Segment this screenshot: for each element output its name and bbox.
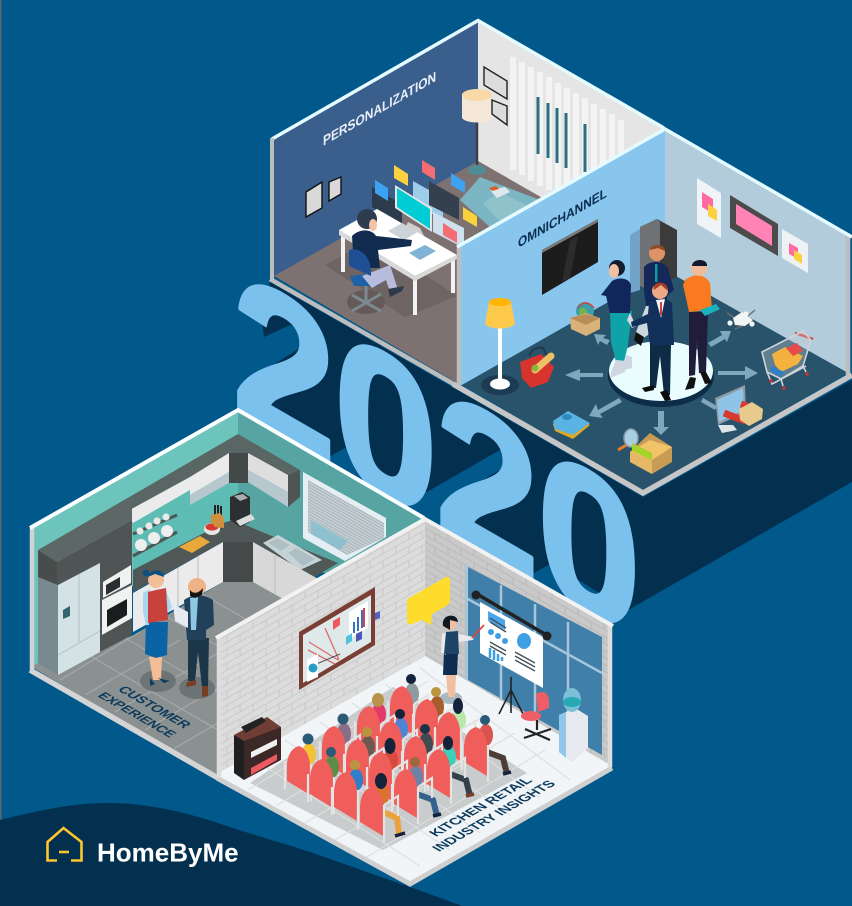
room: omnichannel xyxy=(453,129,852,493)
soffit xyxy=(38,434,300,550)
fridge xyxy=(38,563,100,675)
drone xyxy=(727,310,755,329)
row 4 seat 2 xyxy=(413,687,453,754)
woman with vest xyxy=(140,570,176,692)
room: personalization xyxy=(270,20,665,386)
cardboard box with magnifier xyxy=(618,429,672,474)
floor lamp xyxy=(481,298,519,395)
row 3 seat 3 xyxy=(402,724,442,791)
desk xyxy=(339,209,457,315)
row 2 seat 1 xyxy=(320,714,360,781)
counter top xyxy=(133,520,338,592)
floor xyxy=(274,161,560,383)
row 2 seat 2 xyxy=(344,727,384,794)
desk monitor xyxy=(395,185,432,236)
row 1 seat 1 xyxy=(285,734,316,801)
base strip xyxy=(217,768,612,884)
customer experience label: EXPERIENCE xyxy=(94,690,180,740)
icon: house xyxy=(48,828,82,860)
tower top xyxy=(38,497,132,562)
wall cap xyxy=(216,519,613,638)
cutting board xyxy=(179,536,210,553)
microwave xyxy=(103,565,131,598)
base strips xyxy=(453,375,852,493)
row 1 seat 2 xyxy=(308,747,339,814)
left wall xyxy=(30,410,238,670)
server cabinet xyxy=(630,219,677,293)
shopping basket xyxy=(520,348,554,388)
wall cap xyxy=(272,20,664,139)
corkboard xyxy=(299,587,380,690)
kitchen retail label: KITCHEN RETAIL xyxy=(426,775,536,839)
floor xyxy=(462,270,848,492)
room: kitchen xyxy=(30,410,425,778)
man with tablet xyxy=(173,578,215,699)
back wall xyxy=(133,455,238,592)
bed xyxy=(460,177,540,228)
round platform xyxy=(608,341,714,407)
base cabinets xyxy=(133,542,320,632)
wall art xyxy=(697,178,808,273)
customer experience label: CUSTOMER xyxy=(114,684,195,730)
floor tiles xyxy=(60,590,256,748)
window with blind xyxy=(303,472,386,561)
presenter xyxy=(440,616,484,704)
row 3 seat 2 xyxy=(377,709,417,776)
sticky notes xyxy=(375,160,477,243)
box with globe xyxy=(570,302,600,336)
curtain xyxy=(513,57,621,196)
monitor with delivery hand xyxy=(715,385,763,433)
row 3 seat 4 xyxy=(425,736,474,804)
row 4 seat 3 xyxy=(435,698,475,767)
row 2 seat 4 xyxy=(392,757,441,824)
coffee machine xyxy=(230,492,255,527)
person: orange shirt man xyxy=(683,260,720,390)
office chair xyxy=(347,284,385,314)
floor xyxy=(218,656,612,884)
wall cabinets xyxy=(126,453,300,523)
framed pictures right wall xyxy=(484,67,507,125)
personalization label: PERSONALIZATION xyxy=(323,69,436,149)
wall tv xyxy=(542,219,598,295)
room: conference xyxy=(216,519,613,884)
sink xyxy=(263,535,322,570)
person: man in suit xyxy=(631,283,674,401)
row 1 seat 4 xyxy=(358,773,405,842)
wall edges xyxy=(459,236,848,385)
floor lamp xyxy=(462,89,492,175)
row 2 seat 3 xyxy=(367,738,407,807)
kitchen floor xyxy=(30,582,285,778)
big number 2020: 2020 xyxy=(232,222,638,685)
row 4 seat 1 xyxy=(388,674,428,741)
framed pictures left wall xyxy=(306,177,341,217)
wall cap xyxy=(30,410,424,528)
wall edges xyxy=(219,625,610,778)
shelves with bowls xyxy=(133,513,177,556)
left wall edge xyxy=(270,138,274,279)
red office chair xyxy=(521,692,551,740)
person: woman with phone xyxy=(601,260,636,378)
seating carpet xyxy=(250,687,527,850)
water cooler xyxy=(559,688,588,762)
base strip xyxy=(30,670,218,778)
bowl of tomatoes xyxy=(204,523,220,535)
row 1 seat 3 xyxy=(332,760,363,827)
projector screen xyxy=(472,590,552,714)
floating screens xyxy=(372,181,464,248)
right wall xyxy=(665,130,848,373)
folded shirt xyxy=(553,411,590,439)
tower side xyxy=(38,550,57,587)
person at desk xyxy=(349,209,412,297)
wall cap xyxy=(457,129,852,247)
back right wall xyxy=(478,20,665,200)
row 4 seat 4 xyxy=(462,715,511,782)
kitchen retail label: INDUSTRY INSIGHTS xyxy=(429,778,559,854)
row 3 seat 1 xyxy=(355,693,395,761)
shopping cart xyxy=(762,331,813,390)
knife block xyxy=(211,505,224,528)
speech bubble xyxy=(407,577,450,625)
left wall xyxy=(457,130,665,385)
brand name: HomeByMe xyxy=(97,838,239,868)
wall edge xyxy=(30,528,34,670)
direction arrows xyxy=(565,331,758,435)
omnichannel label: OMNICHANNEL xyxy=(518,185,607,251)
person: back man xyxy=(634,245,674,346)
shelf unit xyxy=(234,717,281,780)
base strip xyxy=(270,279,457,386)
rug shadow xyxy=(325,240,457,317)
audience seats xyxy=(285,674,511,842)
bottom dark wave xyxy=(0,803,462,906)
brick left wall xyxy=(218,520,425,775)
logo: HomeByMe xyxy=(48,828,239,868)
window wall xyxy=(466,565,602,755)
appliance tower xyxy=(57,520,132,675)
right wall xyxy=(238,412,425,580)
oven xyxy=(102,585,132,635)
back left wall xyxy=(270,20,478,280)
brick right wall xyxy=(425,520,612,767)
floor tiles xyxy=(248,668,570,866)
2020 extrusion block xyxy=(254,282,852,613)
